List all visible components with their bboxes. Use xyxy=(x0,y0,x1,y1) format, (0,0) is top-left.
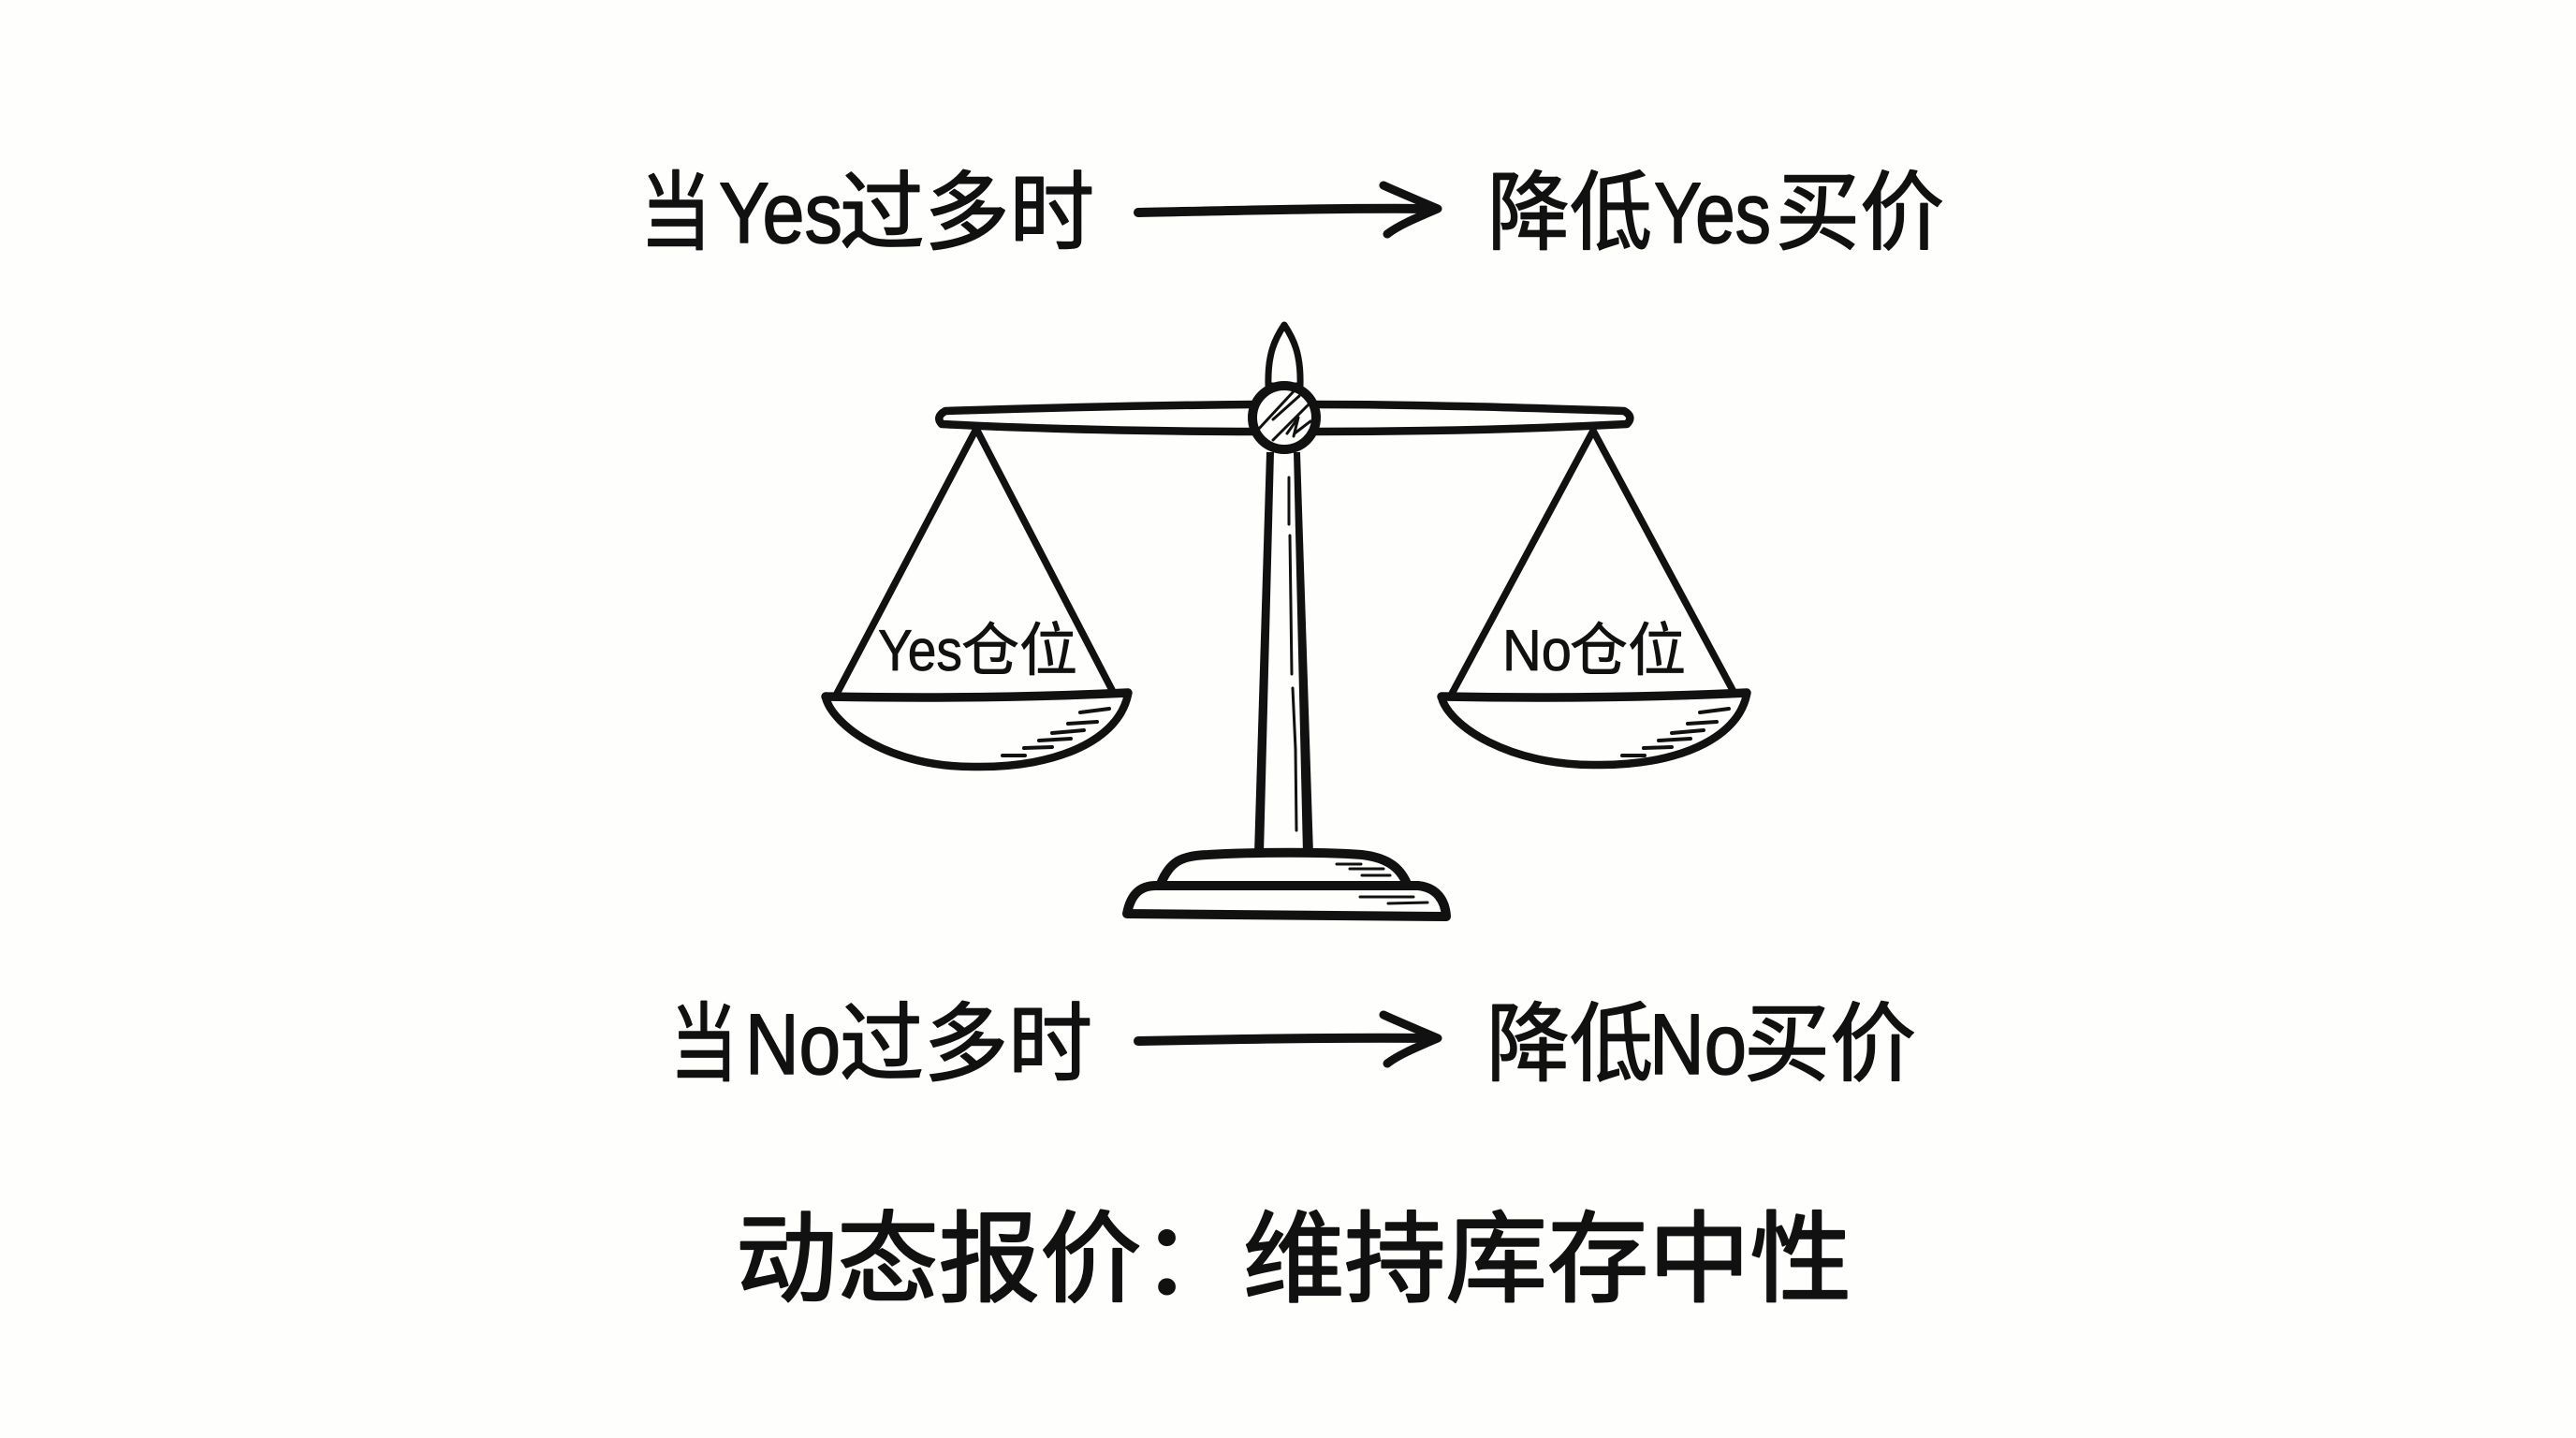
scale pivot knob xyxy=(1252,386,1316,449)
text: when Yes is excessive: Yes xyxy=(719,166,842,261)
text: when No is excessive: 过多时 xyxy=(840,997,1092,1093)
left pan bowl xyxy=(826,693,1128,767)
right pan bowl xyxy=(1442,693,1747,765)
text: lower Yes bid: 买价 xyxy=(1776,166,1944,261)
text: lower Yes bid: Yes xyxy=(1654,166,1771,261)
top row: Yes excess rule xyxy=(640,166,1944,261)
right pan strings xyxy=(1452,431,1733,694)
second row: No excess rule xyxy=(670,997,1916,1093)
arrow: bottom xyxy=(1138,1015,1438,1064)
right pan: No position xyxy=(1442,431,1747,765)
scale pillar xyxy=(1254,452,1313,854)
label: No position: 仓位 xyxy=(1570,619,1686,683)
text: when Yes is excessive: 过多时 xyxy=(840,166,1094,261)
text: lower No bid: 买价 xyxy=(1744,997,1916,1093)
label: No position: No xyxy=(1502,619,1572,683)
text: lower No bid: 降低 xyxy=(1486,997,1653,1093)
balance scale xyxy=(826,325,1747,917)
text: when Yes is excessive: 当 xyxy=(640,166,711,261)
conclusion: dynamic quoting keeps inventory neutral: 动态报价：维持库存中性 xyxy=(736,1205,1852,1315)
left pan strings xyxy=(837,429,1112,694)
text: when Yes is excessive xyxy=(640,166,1094,261)
text: when No is excessive xyxy=(670,997,1092,1093)
scale base xyxy=(1127,853,1446,917)
text: when No is excessive: 当 xyxy=(670,997,738,1093)
label: Yes position: Yes xyxy=(878,619,962,683)
arrow: top xyxy=(1138,185,1438,234)
label: No position xyxy=(1502,619,1686,683)
text: lower No bid xyxy=(1486,997,1916,1093)
left pan: Yes position xyxy=(826,429,1128,767)
scale beam xyxy=(939,404,1630,432)
text: when No is excessive: No xyxy=(745,997,841,1093)
text: lower Yes bid xyxy=(1487,166,1944,261)
text: lower No bid: No xyxy=(1649,997,1747,1093)
label: Yes position: 仓位 xyxy=(961,619,1077,683)
label: Yes position xyxy=(878,619,1077,683)
scale finial xyxy=(1268,325,1300,386)
text: lower Yes bid: 降低 xyxy=(1487,166,1652,261)
